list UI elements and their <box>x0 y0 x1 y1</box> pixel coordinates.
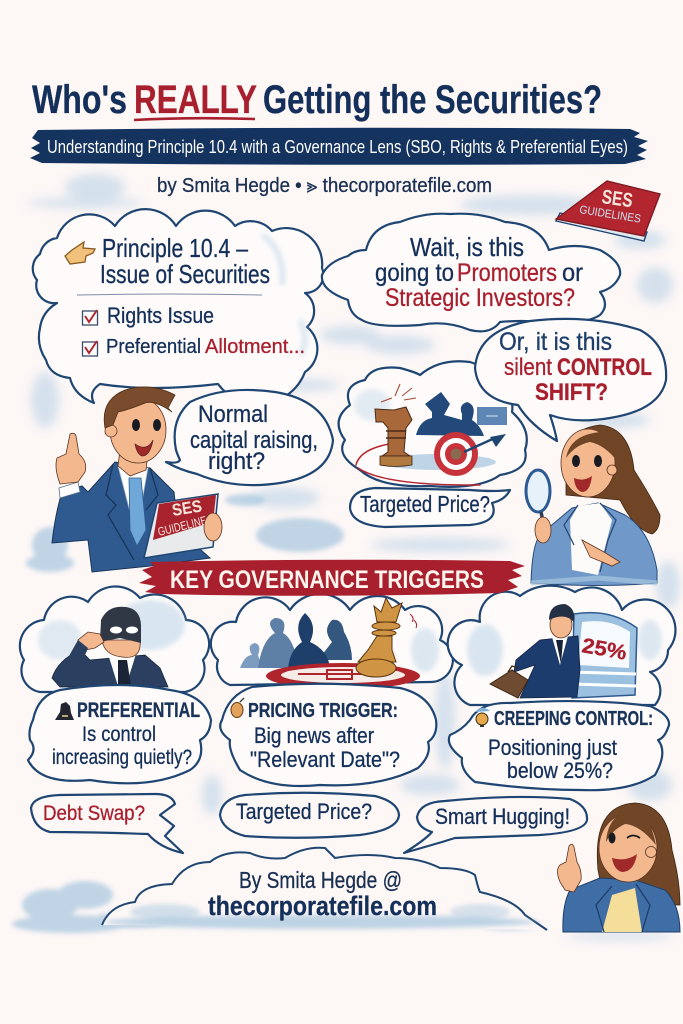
heading: Principle 10.4: Principle 10.4 – <box>102 233 248 263</box>
bubble: targeted price <box>350 488 510 527</box>
panel: pricing trigger <box>211 594 453 786</box>
hair <box>597 803 680 905</box>
man's neck and head <box>118 450 148 476</box>
panel: preferential trigger <box>20 586 211 783</box>
icon: SES guidelines book <box>556 181 660 241</box>
magnifying glass <box>526 470 550 512</box>
checklist: Preferential <box>106 336 201 358</box>
25 percent column <box>572 613 637 698</box>
speech bubble: preferential <box>28 685 211 783</box>
illustration: winking woman <box>558 803 680 932</box>
book: SES guideline <box>144 494 222 558</box>
icon: SES guidelines book: GUIDELINES <box>579 204 642 226</box>
text: control shift question: silent <box>504 354 552 381</box>
footer credit: thecorporatefile.com <box>208 891 437 921</box>
bubble: normal capital raising: Normal <box>198 401 268 428</box>
checklist: Allotment... <box>205 336 305 358</box>
bubble: smart hugging: Smart Hugging! <box>435 804 570 829</box>
checklist: Rights Issue <box>107 303 214 328</box>
thought cloud: masked man <box>20 586 209 692</box>
man's pointing hand <box>56 433 86 484</box>
heading: Principle 10.4: Issue of Securities <box>100 259 270 289</box>
woman's head <box>561 429 615 497</box>
thought cloud: chess king and target <box>339 361 527 487</box>
text: control shift question: CONTROL <box>557 354 652 381</box>
bubble: targeted price: Targeted Price? <box>236 799 372 824</box>
speech bubble: pricing trigger: "Relevant Date"? <box>250 747 400 772</box>
text: control shift question <box>499 328 652 406</box>
panel: Principle 10.4 cloud <box>33 209 323 404</box>
red target ring <box>266 663 420 689</box>
text: going to promoters question: Wait, is this <box>410 232 524 262</box>
section banner: key governance triggers <box>139 560 525 596</box>
speech bubble: creeping control <box>449 701 669 790</box>
panel: Promoters or strategic investors cloud <box>322 214 620 331</box>
checklist <box>82 303 305 358</box>
icon: investor silhouettes <box>416 392 484 436</box>
text: going to promoters question: Strategic Investors? <box>385 284 575 312</box>
people silhouettes <box>240 613 352 668</box>
bubble: normal capital raising: right? <box>208 448 265 475</box>
footer credit: By Smita Hegde @ <box>239 867 402 893</box>
watercolor cloud background <box>12 150 680 940</box>
icon: pointing hand <box>65 242 95 264</box>
jacket <box>563 878 680 932</box>
thought cloud: man at 25% column <box>448 586 675 705</box>
heading: Principle 10.4 <box>100 233 270 289</box>
bubble: targeted price: Targeted Price? <box>360 491 490 517</box>
title: REALLY <box>134 78 257 122</box>
subtitle banner <box>30 128 648 165</box>
icon: bird lamp <box>475 708 490 726</box>
panel: creeping control <box>448 586 675 790</box>
section banner: key governance triggers: KEY GOVERNANCE TRIGGERS <box>170 566 484 594</box>
bubble: targeted price <box>220 793 399 838</box>
speech bubble: creeping control: Positioning just <box>488 735 617 760</box>
icon: briefcase <box>490 666 528 698</box>
text: going to promoters question: or <box>562 259 583 287</box>
speech bubble: preferential: Is control <box>82 723 156 746</box>
woman's hair <box>565 425 660 534</box>
icon: chess queen <box>356 598 417 677</box>
icon: price tag <box>231 698 244 718</box>
title: Who's <box>32 78 127 122</box>
woman's jacket <box>531 503 657 586</box>
book: SES guideline: SES <box>171 496 203 520</box>
text: control shift question: SHIFT? <box>535 379 608 406</box>
speech bubble: pricing trigger: PRICING TRIGGER: <box>248 700 398 722</box>
man in suit <box>514 604 580 698</box>
pointing hand <box>558 844 581 892</box>
book: SES guideline: GUIDELINE <box>156 513 208 539</box>
man's suit <box>52 462 210 572</box>
illustration: woman with magnifying glass <box>526 425 660 586</box>
icon: broken chess king <box>375 384 416 466</box>
icon: spy hat <box>55 702 74 720</box>
bubble: smart hugging <box>404 797 587 853</box>
bubble: normal capital raising <box>166 390 333 485</box>
icon: target with arrow <box>434 432 506 476</box>
speech bubble: pricing trigger: Big news after <box>254 723 374 748</box>
bubble: debt swap: Debt Swap? <box>43 802 145 825</box>
speech bubble: preferential: increasing quietly? <box>52 746 192 769</box>
title <box>32 78 602 122</box>
bubble: debt swap <box>31 794 183 853</box>
byline: by Smita Hegde • ⪢ thecorporatefile.com <box>157 175 492 197</box>
speech bubble: creeping control: below 25%? <box>507 758 613 783</box>
footer cloud <box>102 848 547 930</box>
text: control shift question: Or, it is this <box>499 328 612 356</box>
footer credit <box>208 867 437 921</box>
25 percent column: 25% <box>580 634 629 665</box>
text: going to promoters question: Promoters <box>457 259 557 287</box>
speech bubble: preferential: PREFERENTIAL <box>77 699 200 722</box>
head <box>599 814 657 882</box>
bubble: normal capital raising: capital raising, <box>190 427 318 454</box>
speech bubble: pricing trigger <box>220 684 436 786</box>
panel: silent control shift bubble <box>475 319 666 441</box>
text: going to promoters question <box>375 232 583 312</box>
icon: SES guidelines book: SES <box>600 186 634 212</box>
icon: screen <box>477 407 507 425</box>
masked man <box>52 607 168 687</box>
illustration: man with SES guideline <box>52 387 222 572</box>
text: going to promoters question: going to <box>375 259 454 287</box>
thought cloud: insiders and toppled queen <box>211 594 453 689</box>
